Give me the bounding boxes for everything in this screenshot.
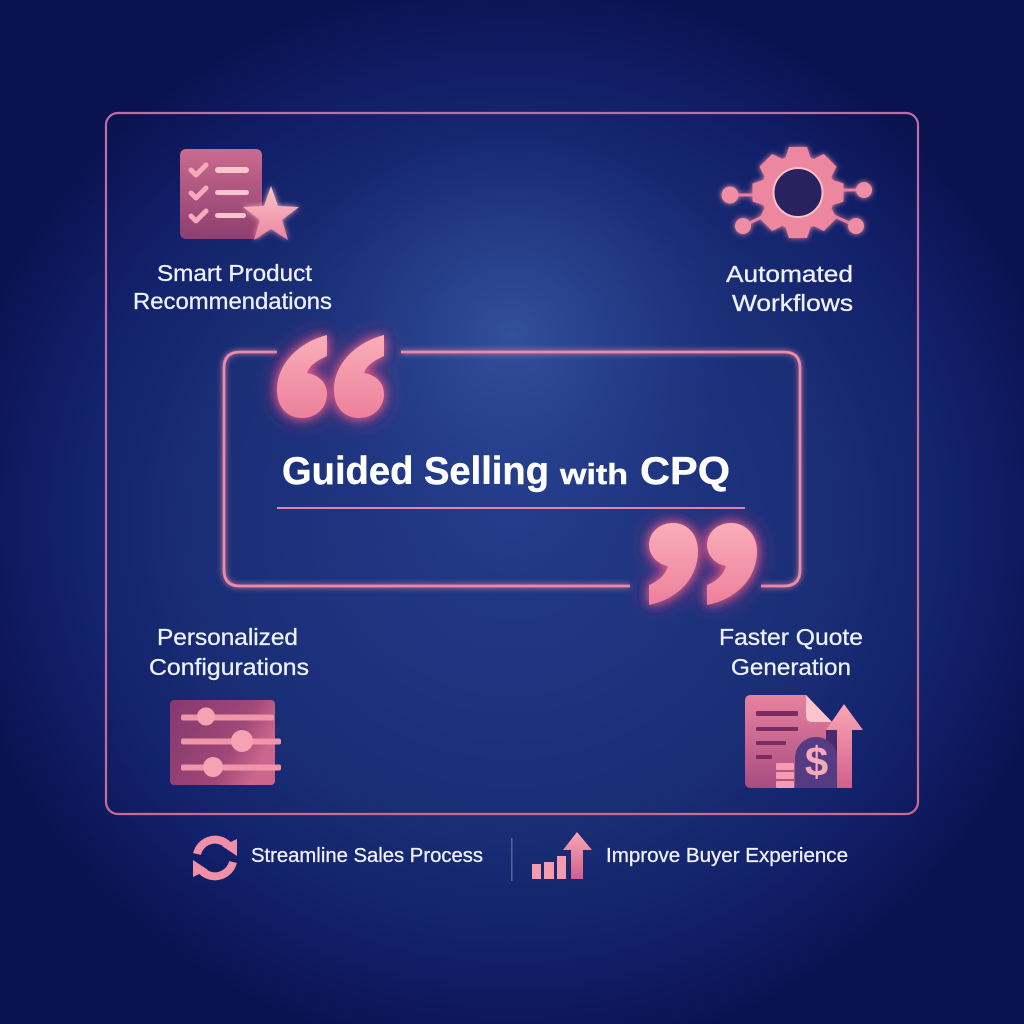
label: faster quote generation: Faster Quote: [719, 624, 863, 650]
feature: smart product recommendations: [133, 149, 332, 314]
label: personalized configurations: Personalized: [157, 624, 298, 650]
title: CPQ: [640, 450, 730, 493]
title underline: [277, 507, 745, 509]
label: streamline sales process: Streamline Sales Process: [251, 845, 483, 867]
icon: quote document with dollar and arrow: [745, 695, 863, 788]
label: smart product recommendations: Smart Product: [157, 260, 313, 286]
benefit: improve buyer experience: [532, 832, 848, 879]
icon: sync arrows: [193, 839, 237, 877]
outer frame panel: [106, 113, 918, 814]
label: automated workflows: Workflows: [732, 290, 853, 316]
icon: opening quotation mark: [277, 335, 384, 418]
title: with: [559, 459, 628, 491]
icon: closing quotation mark: [649, 523, 757, 605]
label: faster quote generation: Generation: [731, 654, 851, 680]
title: Guided Selling: [282, 450, 549, 493]
feature: personalized configurations: [149, 624, 309, 785]
icon: sliders panel: [170, 700, 281, 785]
label: smart product recommendations: Recommendations: [133, 288, 332, 314]
icon: checklist with star: [180, 149, 299, 240]
icon: quote document with dollar and arrow: $: [805, 738, 828, 785]
title: [282, 450, 730, 493]
divider: [511, 838, 512, 881]
feature: automated workflows: [722, 147, 872, 316]
label: improve buyer experience: Improve Buyer Experience: [606, 845, 848, 867]
icon: rising bars and arrow: [532, 832, 592, 879]
icon: gear with nodes: [722, 147, 872, 238]
feature: faster quote generation: [719, 624, 863, 788]
label: automated workflows: Automated: [726, 261, 853, 287]
label: personalized configurations: Configurations: [149, 654, 309, 680]
benefit: streamline sales process: [193, 839, 483, 877]
central quote frame: [224, 352, 800, 586]
